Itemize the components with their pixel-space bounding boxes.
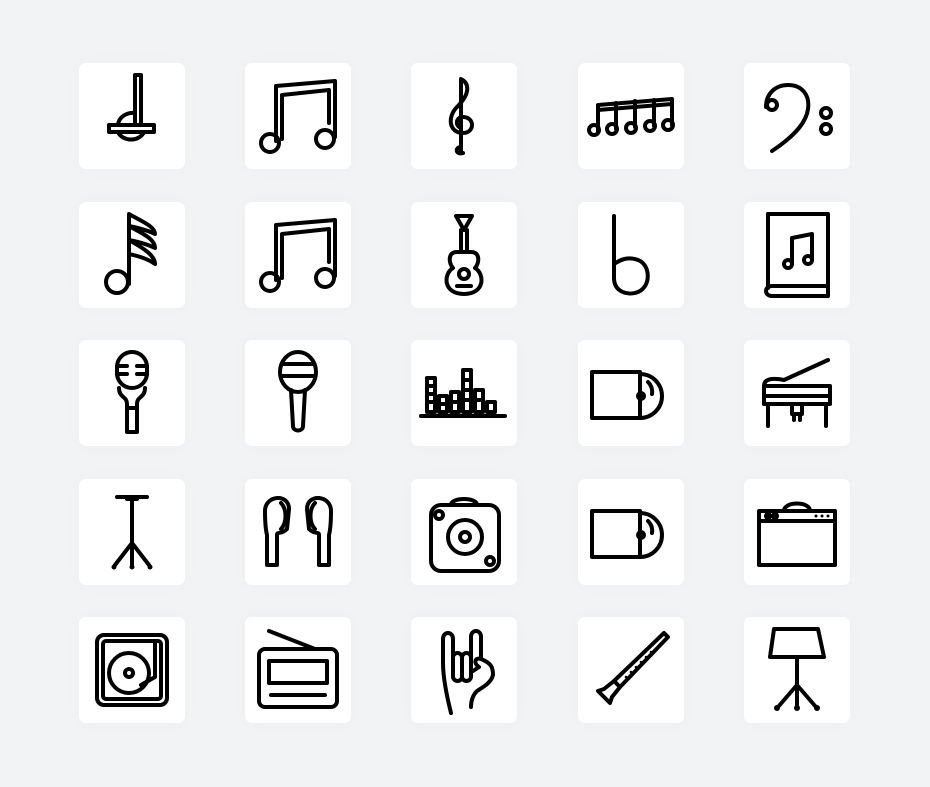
icon: bass clef (744, 63, 850, 169)
icon: sixty-fourth note (79, 202, 185, 308)
icon: radio (245, 617, 351, 723)
icon: cymbal stand (79, 479, 185, 585)
icon: earbuds (245, 479, 351, 585)
icon: beamed eighth notes 2 (245, 202, 351, 308)
icon: note with ledger line (79, 63, 185, 169)
icon: guitar (411, 202, 517, 308)
icon: music stand (744, 617, 850, 723)
icon: speaker (411, 479, 517, 585)
icon: beamed eighth notes (245, 63, 351, 169)
icon: microphone (79, 340, 185, 446)
icon: equalizer (411, 340, 517, 446)
icon: flat sign (578, 202, 684, 308)
icon: clarinet (578, 617, 684, 723)
icon: four beamed notes (578, 63, 684, 169)
icon: vinyl record sleeve (578, 340, 684, 446)
icon: maraca (245, 340, 351, 446)
icon: CD sleeve (578, 479, 684, 585)
icon: rock hand (411, 617, 517, 723)
icon: sheet music (744, 202, 850, 308)
icon: turntable (79, 617, 185, 723)
icon: amplifier (744, 479, 850, 585)
icon: grand piano (744, 340, 850, 446)
icon: treble clef (411, 63, 517, 169)
